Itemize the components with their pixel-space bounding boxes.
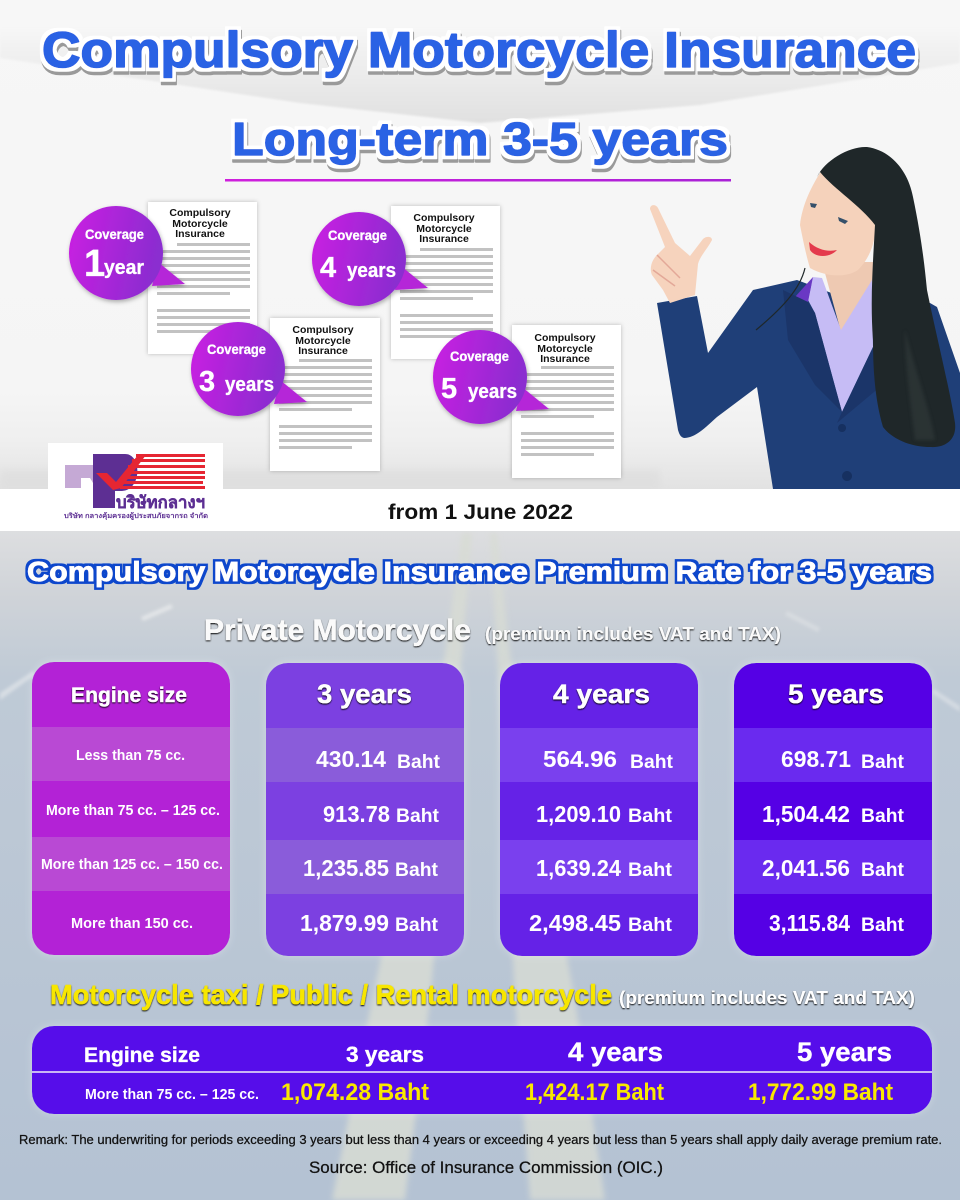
document: 3 years (270, 318, 380, 471)
card: engine size: More than 75 cc. – 125 cc. (46, 802, 220, 819)
title underline (225, 179, 731, 182)
document: 1 year (148, 202, 257, 354)
card: 5 years: 1,504.42 (762, 801, 850, 827)
public motorcycle table: More than 75 cc. – 125 cc. (85, 1086, 259, 1103)
document: 5 years: Motorcycle (537, 343, 593, 355)
bubble: coverage 4 years: years (347, 260, 396, 282)
card: engine size (32, 662, 230, 955)
document: 3 years: Insurance (298, 345, 348, 357)
card: 4 years: 1,209.10 (536, 801, 621, 827)
bubble: coverage 4 years: Coverage (328, 227, 387, 243)
public motorcycle table: 4 years (568, 1037, 663, 1067)
card: 5 years: 5 years (788, 679, 884, 709)
card: engine size: More than 150 cc. (71, 915, 193, 932)
face (800, 170, 875, 275)
card: 3 years: Baht (397, 752, 441, 773)
card: 5 years (734, 663, 932, 956)
card: 3 years: 430.14 (316, 746, 386, 772)
card: 3 years: 3 years (317, 679, 412, 709)
hair highlight (905, 330, 935, 440)
document: 4 years: Motorcycle (416, 223, 472, 235)
public motorcycle heading (50, 979, 915, 1010)
card: 5 years: Baht (861, 806, 905, 827)
bubble: coverage 3 years: Coverage (207, 341, 266, 357)
card: 3 years: Baht (396, 806, 440, 827)
source: Source: Office of Insurance Commission (OIC.) (309, 1159, 663, 1177)
private motorcycle heading (204, 614, 781, 647)
company logo: บริษัท กลางคุ้มครองผู้ประสบภัยจากรถ จำกัด (64, 511, 208, 521)
document: 3 years: Motorcycle (295, 335, 351, 347)
neck (822, 262, 873, 332)
jacket (657, 280, 960, 489)
document: 5 years: Insurance (540, 353, 590, 365)
card: 3 years: 1,879.99 (300, 910, 389, 936)
public motorcycle table: Engine size (84, 1044, 200, 1067)
woman pointing upward (650, 147, 960, 489)
mouth (809, 242, 837, 256)
hair strand (756, 268, 805, 330)
bubble: coverage 4 years: 4 (320, 252, 336, 284)
bubble: coverage 5 years: 5 (441, 373, 457, 405)
card: 4 years: Baht (628, 860, 673, 881)
document: 4 years: Insurance (419, 233, 469, 245)
section heading: Compulsory Motorcycle Insurance Premium Rate for 3-5 years (27, 556, 932, 587)
bubble: coverage 1 year: Coverage (85, 226, 144, 242)
card: 3 years: 913.78 (323, 801, 390, 827)
public motorcycle heading: Motorcycle taxi / Public / Rental motorcycle (50, 979, 612, 1010)
bubble: coverage 1 year: 1 (84, 243, 105, 285)
card: 3 years: 1,235.85 (303, 855, 389, 881)
document: 1 year: Compulsory (169, 207, 231, 219)
bubble: coverage 3 years (191, 322, 307, 416)
date line: from 1 June 2022 (388, 501, 573, 524)
bubble: coverage 5 years (433, 330, 549, 424)
card: 3 years (266, 663, 464, 956)
public motorcycle heading: (premium includes VAT and TAX) (619, 988, 915, 1008)
bubble: coverage 5 years: years (468, 381, 517, 403)
card: 5 years: 698.71 (781, 746, 851, 772)
hair (817, 147, 955, 447)
card: 5 years: 2,041.56 (762, 855, 850, 881)
bubble: coverage 3 years: 3 (199, 366, 215, 398)
public motorcycle table: 3 years (346, 1042, 424, 1067)
card: 5 years: Baht (861, 860, 905, 881)
hand (650, 205, 712, 303)
card: 3 years: Baht (395, 860, 439, 881)
remark: Remark: The underwriting for periods exceeding 3 years but less than 4 years or exceeding 4 years but less than 5 years shall apply daily average premium rate. (19, 1133, 942, 1147)
document: 1 year: Motorcycle (172, 218, 228, 230)
right lapel (837, 347, 880, 423)
finger folds (653, 255, 680, 286)
left lapel (783, 290, 842, 412)
card: 4 years: 1,639.24 (536, 855, 621, 881)
background: top section (0, 0, 960, 490)
public motorcycle table: 1,772.99 Baht (748, 1079, 893, 1106)
document: 5 years: Compulsory (534, 332, 596, 344)
shirt (808, 277, 873, 412)
public motorcycle table: 1,424.17 Baht (525, 1079, 664, 1106)
card: 4 years: 2,498.45 (529, 910, 621, 936)
document: 3 years: Compulsory (292, 324, 354, 336)
bubble: coverage 5 years: Coverage (450, 348, 509, 364)
card: 4 years (500, 663, 698, 956)
card: 5 years: Baht (861, 752, 905, 773)
card: 4 years: 564.96 (543, 746, 617, 772)
document: 4 years (391, 206, 500, 359)
card: 5 years: 3,115.84 (769, 910, 850, 936)
jacket buttons (838, 424, 852, 481)
card: 5 years: Baht (861, 915, 905, 936)
bubble: coverage 4 years (312, 212, 428, 306)
card: 4 years: Baht (628, 806, 673, 827)
shirt inner collar (795, 277, 813, 302)
document: 5 years (512, 325, 621, 478)
document: 1 year: Insurance (175, 228, 225, 240)
card: 4 years: 4 years (553, 679, 650, 709)
eyes (810, 203, 848, 224)
company logo: บริษัทกลางฯ (116, 493, 205, 512)
document: 4 years: Compulsory (413, 212, 475, 224)
public motorcycle table: 5 years (797, 1037, 892, 1067)
public motorcycle table (32, 1026, 932, 1114)
card: engine size: Less than 75 cc. (76, 747, 185, 764)
title line 1: Compulsory Motorcycle Insurance (42, 22, 916, 78)
card: engine size: More than 125 cc. – 150 cc. (41, 856, 223, 873)
public motorcycle table: 1,074.28 Baht (281, 1079, 429, 1106)
card: 3 years: Baht (395, 915, 439, 936)
company logo (48, 443, 223, 523)
background: lower road section (0, 531, 960, 1200)
card: engine size: Engine size (71, 684, 187, 707)
bubble: coverage 3 years: years (225, 374, 274, 396)
card: 4 years: Baht (630, 752, 674, 773)
white date band (0, 489, 960, 531)
card: 4 years: Baht (628, 915, 673, 936)
private motorcycle heading: Private Motorcycle (204, 614, 471, 647)
private motorcycle heading: (premium includes VAT and TAX) (485, 624, 781, 644)
title line 2: Long-term 3-5 years (232, 113, 728, 165)
bubble: coverage 1 year (69, 206, 185, 300)
bubble: coverage 1 year: year (104, 257, 144, 279)
